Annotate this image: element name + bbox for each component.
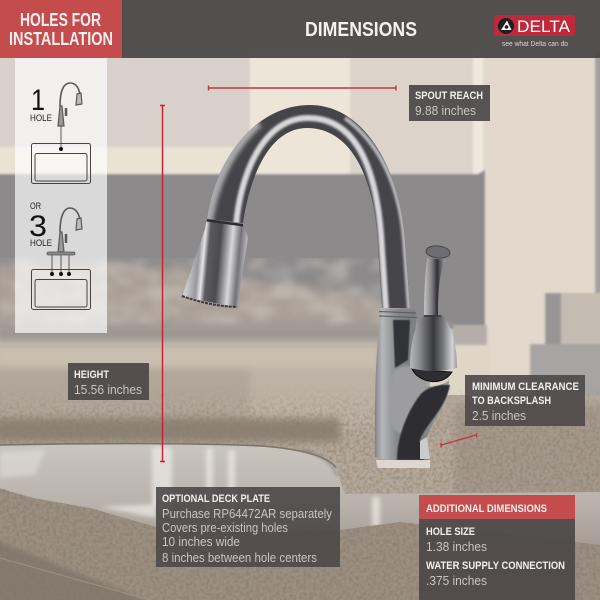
panel: holes for installation heading — [0, 0, 122, 58]
handle — [410, 245, 457, 382]
callout: height — [68, 363, 149, 400]
faucet — [182, 105, 457, 468]
icon: faucet with deck plate on three hole sink — [32, 208, 90, 310]
callout: height: 15.56 inches — [74, 383, 142, 397]
logo: Delta: DELTA — [517, 18, 570, 36]
spray head — [182, 219, 248, 307]
callout: optional deck plate: Purchase RP64472AR separately — [162, 507, 333, 521]
callout: spout reach — [409, 85, 490, 121]
callout: spout reach: 9.88 inches — [415, 104, 476, 118]
arrow: height dimension line — [160, 105, 165, 462]
spout — [207, 105, 410, 310]
one hole option: HOLE — [30, 113, 52, 123]
arrow: backsplash clearance dimension line — [441, 433, 476, 448]
one hole option — [30, 83, 90, 184]
countertop — [0, 345, 600, 530]
callout: optional deck plate: OPTIONAL DECK PLATE — [162, 493, 270, 505]
front counter — [0, 488, 600, 600]
panel: additional dimensions: HOLE SIZE — [426, 526, 475, 538]
panel: additional dimensions: WATER SUPPLY CONNECTION — [426, 560, 565, 572]
sink basin — [0, 444, 600, 600]
top header bar — [0, 0, 600, 58]
logo: Delta — [494, 15, 575, 48]
callout: spout reach: SPOUT REACH — [415, 90, 483, 102]
heading: dimensions: DIMENSIONS — [305, 19, 417, 41]
callout: optional deck plate: Covers pre-existing holes — [162, 521, 288, 535]
panel: installation hole options — [15, 58, 107, 333]
faucet body — [375, 308, 450, 468]
one hole option: 1 — [31, 84, 45, 117]
callout: minimum clearance to backsplash: MINIMUM CLEARANCE — [472, 381, 579, 393]
three hole option: OR — [30, 201, 41, 211]
panel: additional dimensions — [419, 495, 575, 600]
panel: additional dimensions: 1.38 inches — [426, 540, 487, 554]
callout: optional deck plate — [156, 487, 340, 567]
logo: Delta: see what Delta can do — [502, 41, 568, 48]
arrow: spout reach dimension line — [208, 86, 396, 90]
panel: additional dimensions: .375 inches — [426, 574, 487, 588]
icon: faucet on one hole sink — [32, 83, 90, 184]
panel: holes for installation heading: HOLES FOR — [20, 10, 101, 30]
three hole option: HOLE — [30, 238, 52, 248]
callout: optional deck plate: 8 inches between hole centers — [162, 551, 317, 565]
panel: additional dimensions: ADDITIONAL DIMENSIONS — [426, 503, 547, 515]
panel: holes for installation heading: INSTALLATION — [9, 29, 113, 49]
callout: optional deck plate: 10 inches wide — [162, 535, 240, 549]
callout: height: HEIGHT — [74, 369, 109, 381]
three hole option: 3 — [29, 210, 47, 243]
callout: minimum clearance to backsplash — [465, 375, 585, 426]
three hole option — [29, 201, 90, 310]
callout: minimum clearance to backsplash: TO BACKSPLASH — [472, 395, 551, 407]
callout: minimum clearance to backsplash: 2.5 inches — [472, 409, 526, 423]
